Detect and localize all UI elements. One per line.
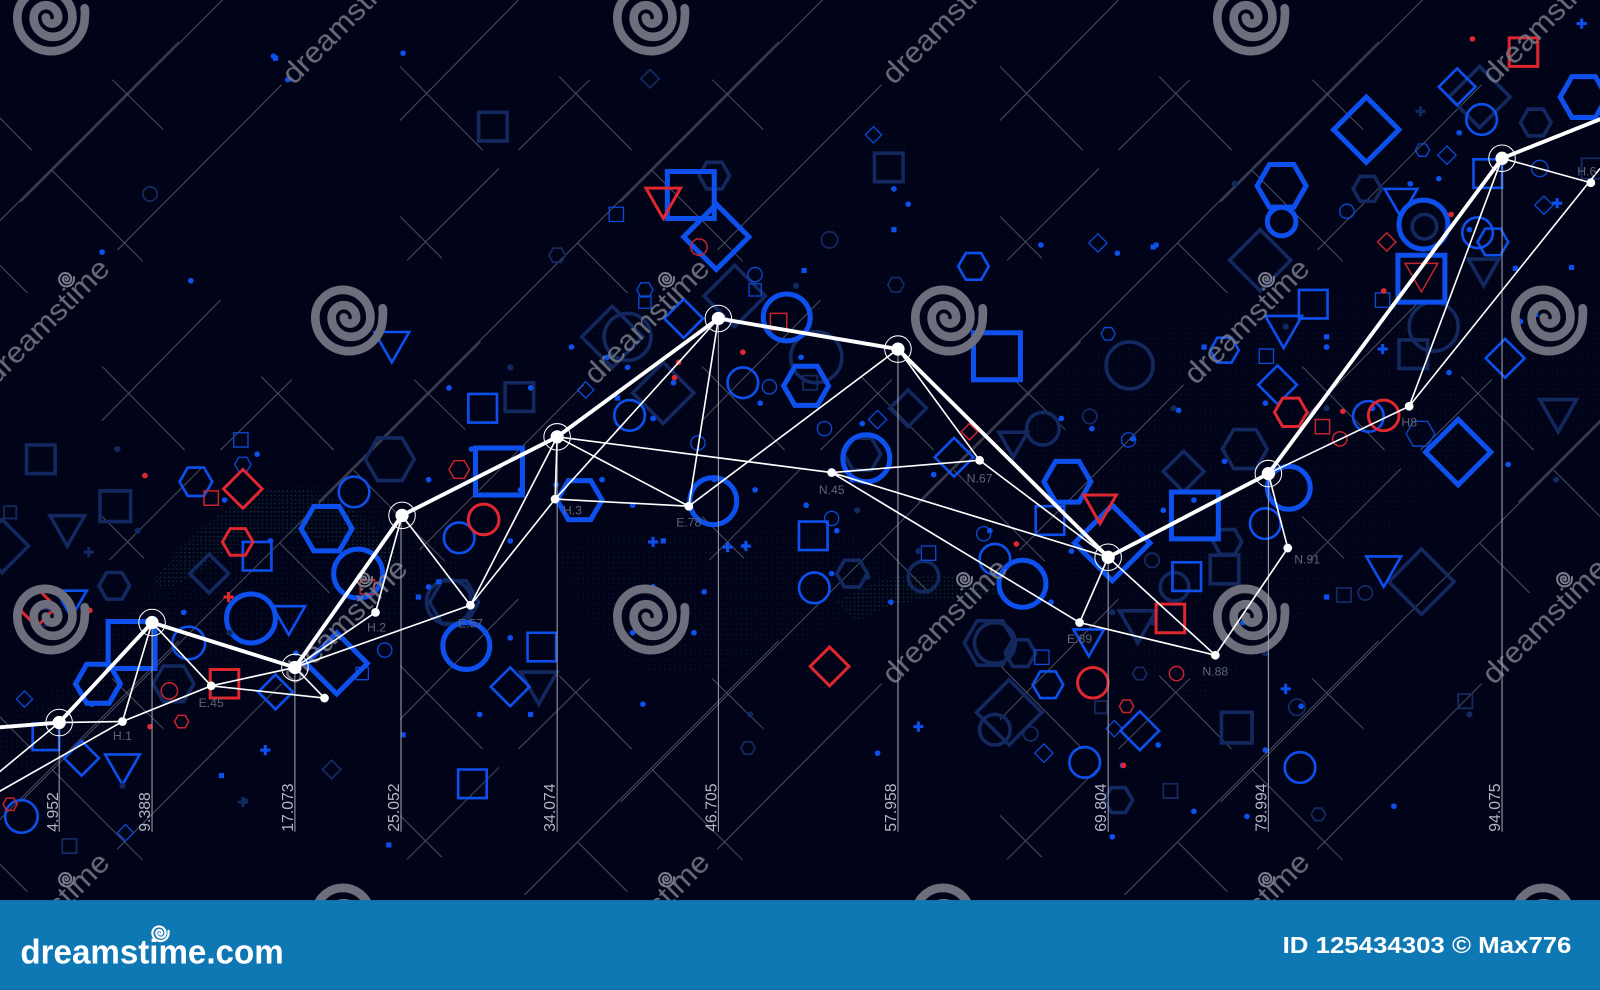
watermark words: dreamstime bbox=[1178, 846, 1316, 985]
particle waves bbox=[0, 41, 1600, 786]
watermark words: dreamstime bbox=[1178, 252, 1316, 391]
node labels: E.57 bbox=[458, 617, 483, 631]
small blue dots bbox=[92, 53, 1551, 837]
node labels: H.2 bbox=[367, 621, 386, 635]
small watermark spirals bbox=[59, 273, 1572, 886]
main line chart bbox=[0, 116, 1600, 728]
axis value labels: 79.994 bbox=[1253, 783, 1270, 832]
node labels: E.78 bbox=[676, 516, 702, 530]
small dim dots bbox=[117, 184, 1556, 801]
axis value labels: 17.073 bbox=[280, 783, 297, 832]
watermark words: dreamstime bbox=[578, 846, 716, 985]
axis value labels: 25.052 bbox=[386, 783, 403, 832]
bold blue shapes bbox=[76, 77, 1600, 703]
node labels: H.6 bbox=[1577, 165, 1596, 179]
axis value labels bbox=[45, 783, 1504, 832]
axis value labels: 57.958 bbox=[883, 783, 900, 832]
footer band bbox=[0, 900, 1600, 990]
dim geometric shapes bbox=[0, 66, 1577, 813]
blue plus markers bbox=[260, 18, 1587, 755]
node labels: H8 bbox=[1401, 416, 1417, 430]
thin detail blue shapes bbox=[16, 127, 1553, 841]
thin network lines bbox=[0, 158, 1600, 794]
red plus marker bbox=[223, 592, 234, 602]
node labels bbox=[113, 165, 1596, 743]
watermark words: dreamstime bbox=[275, 552, 414, 691]
node labels: E.45 bbox=[199, 696, 224, 710]
node labels: N.45 bbox=[819, 483, 845, 497]
node labels: N.88 bbox=[1202, 665, 1228, 679]
node labels: N.91 bbox=[1294, 552, 1320, 566]
faint thin shapes bbox=[4, 69, 1600, 853]
footer logo: dreamstime.com bbox=[20, 933, 284, 971]
axis value labels: 9.388 bbox=[137, 792, 154, 832]
bright thin blue shapes bbox=[5, 68, 1524, 833]
red bold shapes bbox=[17, 38, 1538, 698]
dim plus markers bbox=[84, 106, 1426, 807]
red dots bbox=[90, 39, 1473, 765]
minor nodes bbox=[118, 178, 1595, 726]
watermark words: dreamstime bbox=[875, 552, 1014, 691]
axis value labels: 4.952 bbox=[45, 792, 62, 832]
axis value labels: 34.074 bbox=[542, 783, 559, 832]
footer image id: ID 125434303 © Max776 bbox=[1283, 932, 1571, 958]
axis value labels: 46.705 bbox=[703, 783, 720, 832]
node labels: H.1 bbox=[113, 729, 132, 743]
axis value labels: 94.075 bbox=[1487, 783, 1504, 832]
small blue squares bbox=[221, 58, 1572, 845]
major nodes bbox=[46, 145, 1515, 736]
node labels: H.3 bbox=[563, 503, 582, 517]
node labels: N.67 bbox=[967, 472, 993, 486]
axis value labels: 69.804 bbox=[1093, 783, 1110, 832]
red thin shapes bbox=[3, 233, 1438, 810]
vertical data lines bbox=[59, 158, 1502, 832]
node labels: E.89 bbox=[1067, 632, 1092, 646]
watermark words: dreamstime bbox=[578, 252, 716, 391]
